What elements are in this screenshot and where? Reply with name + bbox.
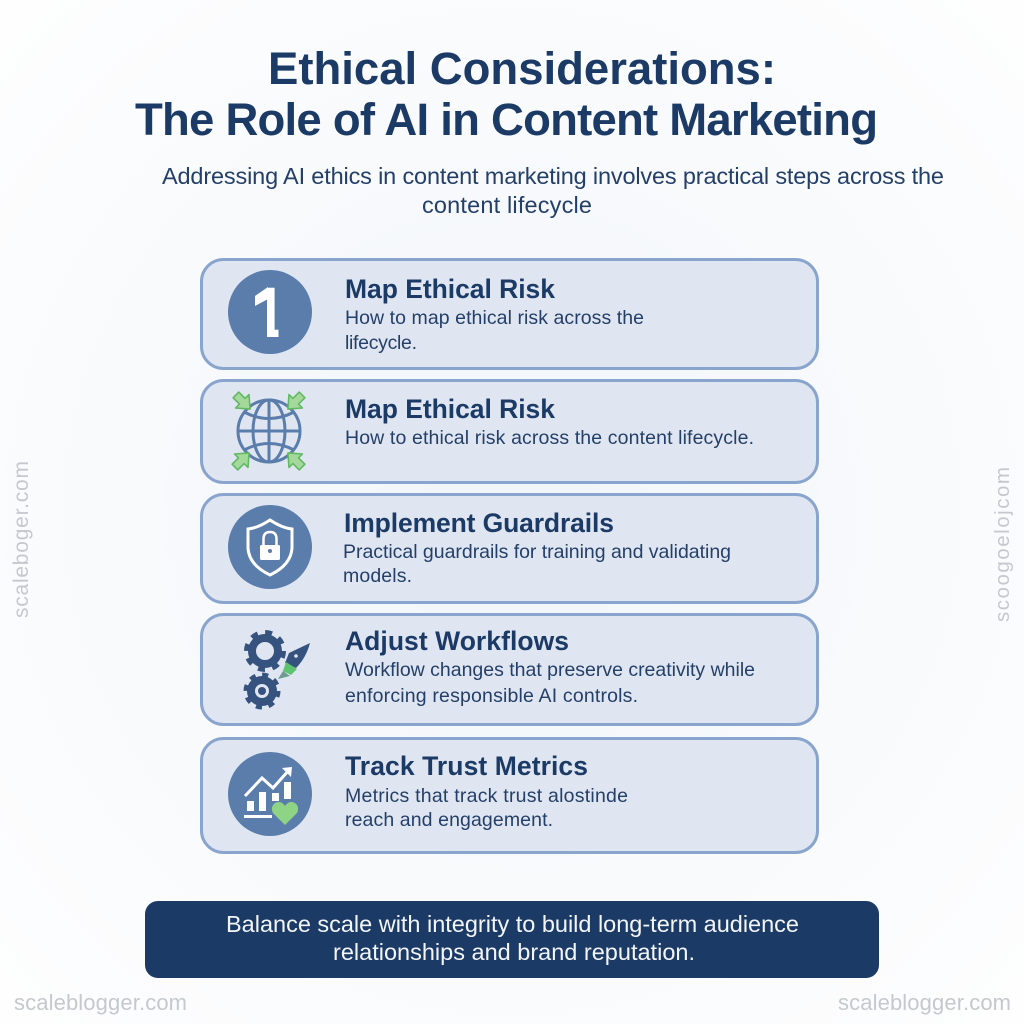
panel: step 4 adjust workflows (202, 614, 818, 724)
callout: footer banner (145, 901, 879, 978)
watermark: bottom left: scaleblogger.com (14, 990, 187, 1015)
text: step 5 description: reach and engagement. (345, 809, 553, 831)
text: step 3 description: models. (343, 565, 412, 587)
text: step 5 description: Metrics that track trust alostinde (345, 785, 628, 807)
subtitle (162, 163, 944, 218)
text: step 4 description (345, 659, 755, 707)
icon: gears and rocket (246, 632, 310, 707)
heading: track trust metrics: Track Trust Metrics (345, 751, 588, 781)
text: step 4 description: enforcing responsible AI controls. (345, 685, 638, 707)
title: The Role of AI in Content Marketing (135, 94, 878, 145)
watermark: right side: scoogoelojcom (991, 467, 1014, 622)
icon: number 1 badge: 1 (248, 274, 288, 353)
heading: map ethical risk: Map Ethical Risk (345, 394, 555, 424)
title (135, 43, 878, 145)
text: step 5 description (345, 785, 628, 831)
panel: step 3 implement guardrails (202, 494, 818, 602)
text: step 1 description: lifecycle. (345, 332, 417, 354)
callout: footer banner: Balance scale with integrity to build long-term audience (226, 911, 799, 937)
watermark: bottom right: scaleblogger.com (838, 990, 1011, 1015)
heading: implement guardrails: Implement Guardrails (344, 508, 614, 538)
subtitle: Addressing AI ethics in content marketing involves practical steps across the (162, 163, 944, 189)
text: step 2 description: How to ethical risk across the content lifecycle. (345, 427, 754, 449)
panel: step 1 map ethical risk (202, 260, 818, 368)
watermark: left side: scaleboger.com (10, 461, 33, 618)
heading: adjust workflows: Adjust Workflows (345, 626, 569, 656)
callout: footer banner: relationships and brand reputation. (333, 939, 695, 965)
text: step 3 description: Practical guardrails for training and validating (343, 541, 731, 563)
text: step 1 description (345, 307, 644, 354)
icon: number 1 badge (228, 270, 312, 354)
panel: step 2 map ethical risk (202, 380, 818, 482)
heading: map ethical risk: Map Ethical Risk (345, 274, 555, 304)
subtitle: content lifecycle (422, 192, 592, 218)
icon: chart with heart (228, 752, 312, 836)
title: Ethical Considerations: (268, 43, 776, 94)
text: step 1 description: How to map ethical risk across the (345, 307, 644, 329)
panel: step 5 track trust metrics (202, 738, 818, 852)
icon: globe with arrows (228, 388, 309, 474)
text: step 4 description: Workflow changes that preserve creativity while (345, 659, 755, 681)
text: step 3 description (343, 541, 731, 587)
icon: shield with lock (228, 505, 312, 589)
